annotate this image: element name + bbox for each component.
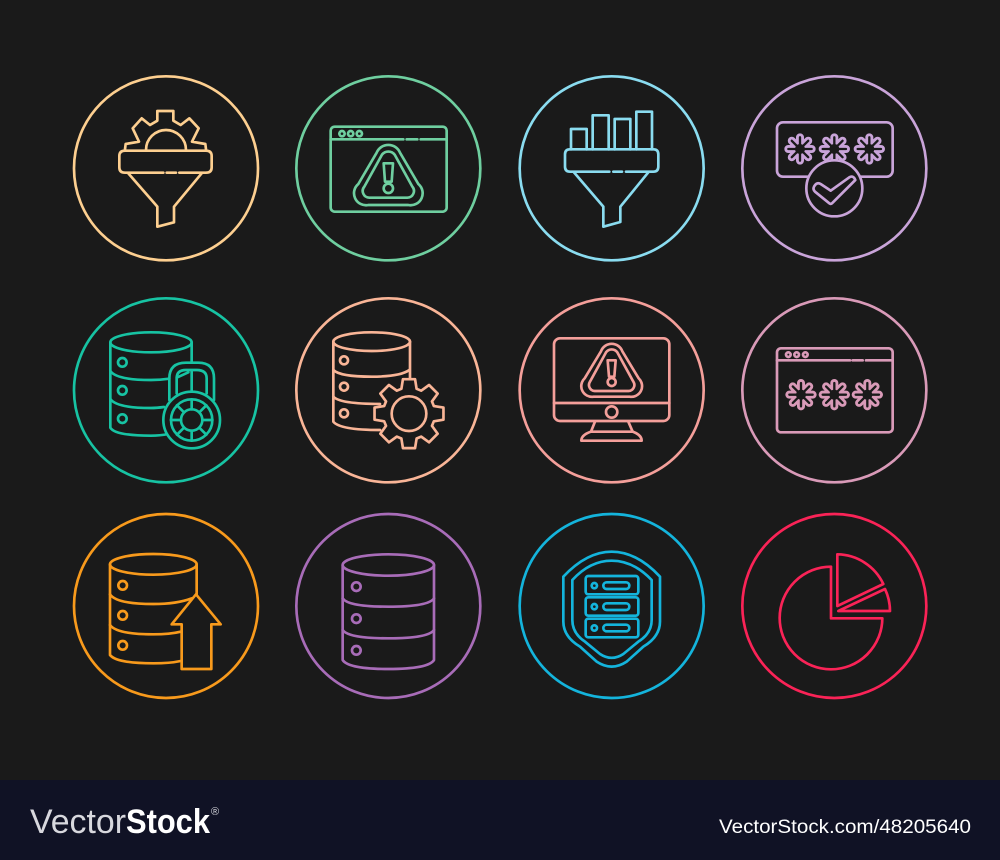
icon: database xyxy=(296,514,480,698)
icon: server shield xyxy=(520,514,704,698)
image id: VectorStock.com/48205640 xyxy=(719,817,971,838)
footer band xyxy=(0,780,1000,860)
icon: database with upload arrow xyxy=(74,514,258,698)
icon: pie chart xyxy=(742,514,926,698)
logo wordmark: Vector xyxy=(30,803,126,841)
icon: monitor with warning xyxy=(520,298,704,482)
icon: funnel with gear xyxy=(74,76,258,260)
logo wordmark bold: Stock xyxy=(126,803,210,841)
icon: password accepted xyxy=(742,76,926,260)
icon: database with padlock xyxy=(74,298,258,482)
icon: browser window with password xyxy=(742,298,926,482)
registered mark: ® xyxy=(211,806,219,818)
icon: database with gear xyxy=(296,298,480,482)
icon: funnel with bar chart xyxy=(520,76,704,260)
icon: browser window with warning xyxy=(296,76,480,260)
